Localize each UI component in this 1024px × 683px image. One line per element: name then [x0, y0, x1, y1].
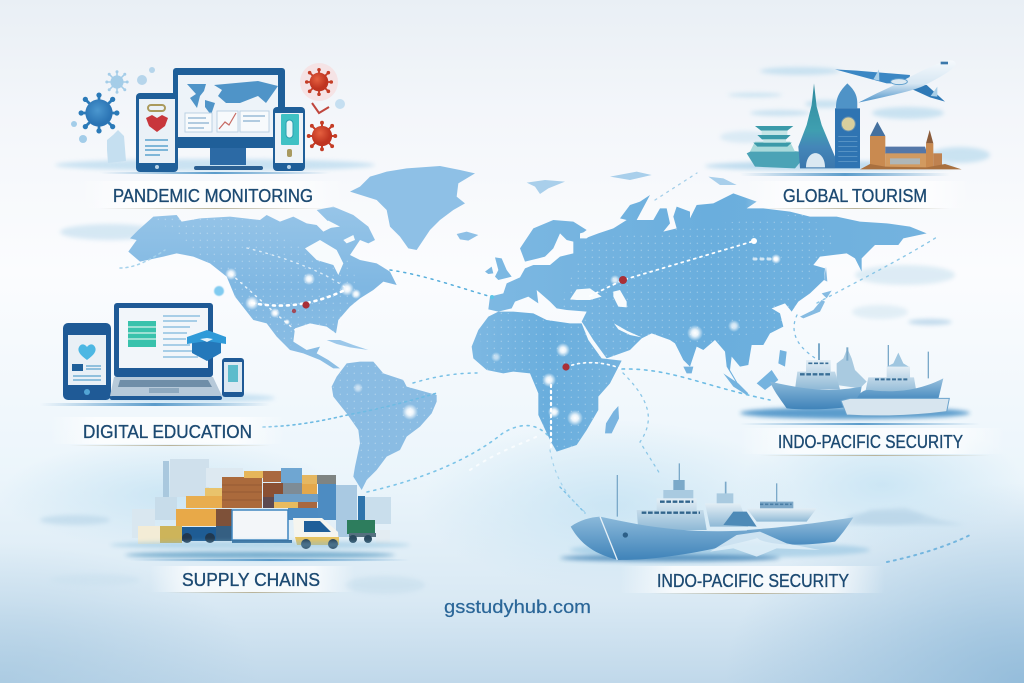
distant land — [845, 508, 965, 525]
heading: SUPPLY CHAINS — [182, 569, 320, 590]
Greenland — [350, 166, 475, 250]
Persian Gulf, Caspian and Black Sea — [570, 228, 642, 337]
ground wash — [55, 159, 375, 171]
heading: DIGITAL EDUCATION — [83, 421, 252, 442]
continents: Americas — [128, 166, 478, 490]
ground streaks — [85, 393, 275, 403]
brick church — [860, 122, 962, 169]
Eurasia — [488, 193, 927, 390]
South America — [332, 362, 437, 490]
bow splash — [710, 532, 820, 557]
label plate — [745, 181, 970, 208]
label plate — [80, 181, 345, 208]
Caribbean — [327, 340, 368, 350]
world map — [120, 166, 970, 562]
white trailer — [232, 510, 292, 543]
left ship — [770, 343, 862, 409]
Hudson Bay and arctic channels — [295, 215, 355, 275]
airplane — [835, 60, 956, 103]
Japan and Sakhalin — [800, 267, 832, 318]
landmarks and airplane — [747, 60, 962, 169]
icon: graduation cap — [187, 330, 226, 361]
middle ship — [705, 482, 757, 527]
label plate — [50, 417, 285, 444]
ships group — [770, 343, 949, 416]
British Isles — [485, 257, 512, 280]
icon: faint viruses — [71, 67, 155, 143]
dotted routes — [120, 173, 970, 562]
Africa — [472, 312, 622, 452]
pagoda — [747, 126, 805, 168]
icon: blue virus — [79, 93, 119, 133]
shadow line — [740, 173, 950, 176]
clouds — [720, 67, 990, 163]
monitor — [173, 68, 285, 170]
panel: indo-pacific security upper — [740, 343, 1005, 456]
panel: supply chains — [110, 459, 410, 593]
icon: red virus top — [300, 63, 338, 101]
road shadow — [125, 552, 395, 558]
label plate — [740, 428, 1005, 454]
small boat — [841, 398, 949, 416]
rear ship — [837, 347, 867, 388]
label plate — [150, 566, 355, 592]
tablet — [63, 323, 111, 400]
warehouse buildings — [132, 459, 391, 538]
phone — [222, 358, 244, 397]
label plate — [620, 566, 885, 593]
Southeast Asian islands — [683, 350, 787, 395]
shadow line — [100, 172, 330, 174]
website footer: gsstudyhub.com — [444, 597, 591, 617]
icon: checkmark — [312, 103, 329, 113]
panel: global tourism — [705, 60, 990, 209]
heading: GLOBAL TOURISM — [783, 185, 927, 206]
right ship — [747, 483, 853, 545]
Arctic islands — [527, 172, 737, 194]
heading: INDO-PACIFIC SECURITY — [778, 431, 963, 452]
green truck — [347, 520, 390, 544]
panel: digital education — [40, 303, 285, 446]
Iceland — [457, 232, 478, 241]
phone — [273, 107, 305, 171]
water — [570, 542, 870, 558]
building icon — [107, 130, 126, 163]
red location markers — [292, 276, 627, 371]
main ship — [571, 463, 757, 560]
clock tower — [835, 83, 860, 168]
tablet — [136, 93, 178, 172]
cargo truck — [138, 526, 232, 544]
Madagascar — [605, 406, 619, 433]
panel: indo-pacific security lower — [560, 463, 965, 594]
van — [293, 518, 339, 549]
shipping containers — [176, 468, 336, 526]
laptop — [110, 303, 222, 400]
heading: INDO-PACIFIC SECURITY — [657, 570, 849, 591]
ships group — [571, 463, 853, 560]
panel: pandemic monitoring — [55, 63, 375, 209]
wash — [705, 161, 955, 171]
continents: Eurasia and Africa — [472, 172, 927, 452]
heading: PANDEMIC MONITORING — [113, 185, 313, 206]
North America — [128, 207, 397, 368]
eiffel tower — [798, 83, 835, 168]
right ship — [857, 345, 943, 399]
icon: red virus bottom — [307, 121, 337, 151]
city glow nodes — [214, 238, 781, 426]
water — [740, 407, 970, 419]
